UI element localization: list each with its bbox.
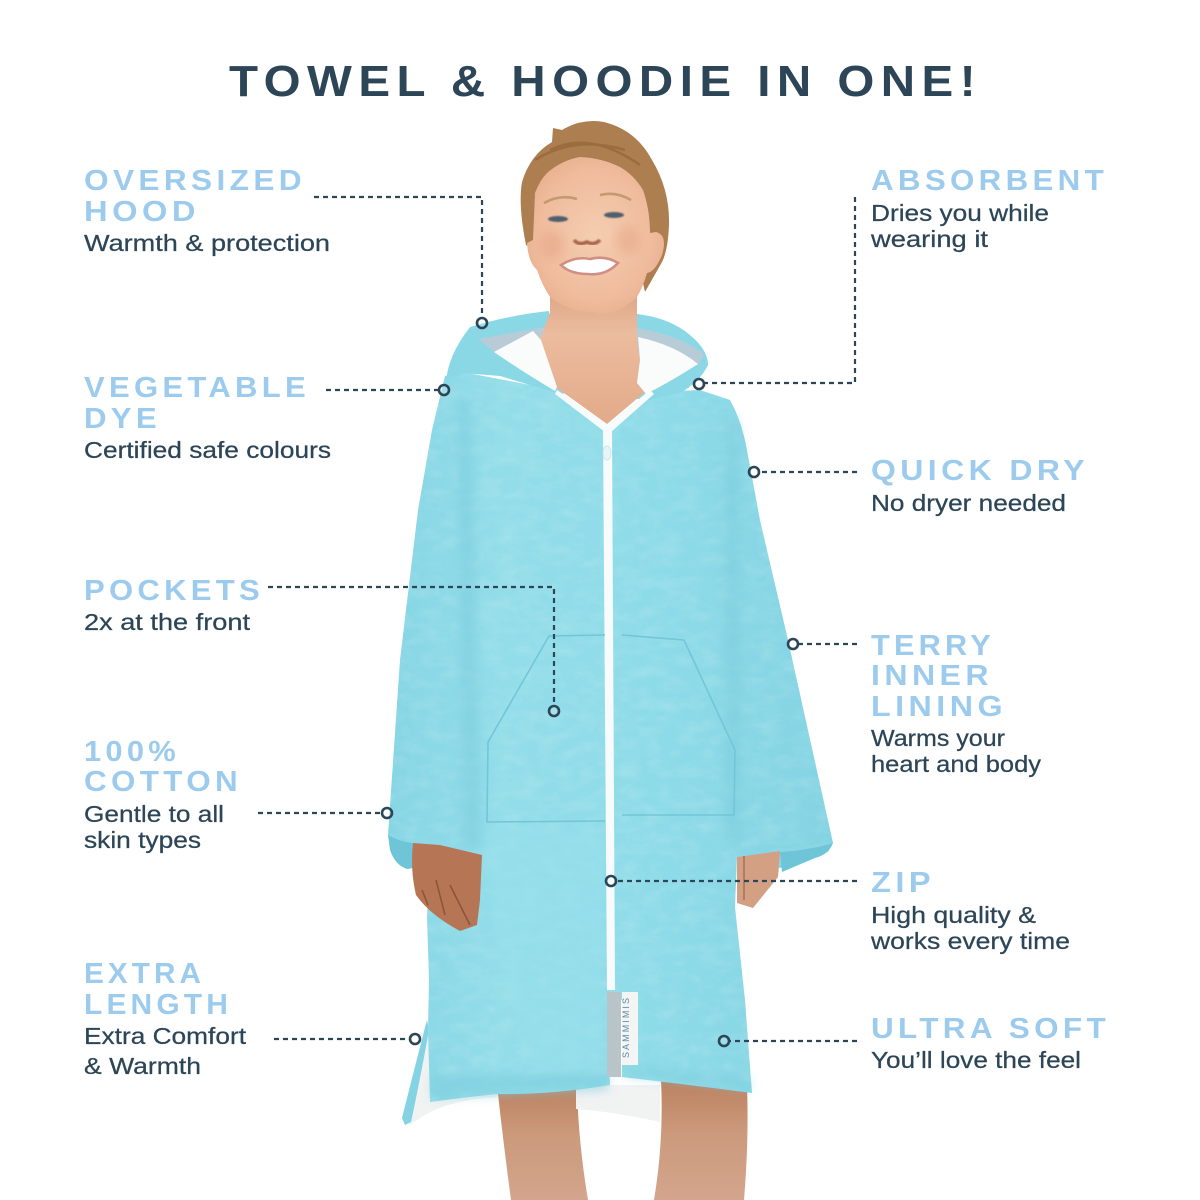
callout: terry inner lining: INNER <box>871 660 993 692</box>
callout: pockets <box>84 575 559 716</box>
callout: 100% cotton: 100% <box>84 736 180 768</box>
callout: terry inner lining: LINING <box>871 691 1007 723</box>
callout: extra length: EXTRA <box>84 958 205 990</box>
callout: absorbent: wearing it <box>870 226 989 252</box>
face <box>527 157 664 313</box>
label tag: SAMMIMIS <box>621 998 631 1058</box>
title: TOWEL & HOODIE IN ONE! <box>229 57 982 106</box>
hair <box>521 121 669 292</box>
pockets <box>487 635 735 822</box>
callout: quick dry: No dryer needed <box>871 490 1066 516</box>
callout: zip <box>606 867 1070 954</box>
callout: extra length: & Warmth <box>84 1053 201 1079</box>
callout: extra length: Extra Comfort <box>84 1023 247 1049</box>
eyes <box>548 212 624 222</box>
neck and chest <box>540 285 645 424</box>
robe fabric texture <box>388 372 833 1102</box>
callout: ultra soft <box>719 1013 1110 1073</box>
callout: oversized hood: OVERSIZED <box>84 165 306 197</box>
callout: vegetable dye <box>84 372 449 463</box>
hands <box>412 843 780 931</box>
callout: extra length <box>84 958 420 1079</box>
callout: vegetable dye: DYE <box>84 403 161 435</box>
callout: zip: works every time <box>870 928 1070 954</box>
callout: 100% cotton <box>84 736 392 853</box>
hood <box>446 311 708 400</box>
eyebrows <box>544 194 631 203</box>
callout: 100% cotton: Gentle to all <box>84 801 224 827</box>
callout: ultra soft: You’ll love the feel <box>871 1047 1081 1073</box>
callout: extra length: LENGTH <box>84 989 232 1021</box>
callout: quick dry: QUICK DRY <box>871 455 1089 487</box>
zip <box>555 390 654 990</box>
callout: vegetable dye: Certified safe colours <box>84 437 331 463</box>
robe <box>388 372 833 1102</box>
callout: ultra soft: ULTRA SOFT <box>871 1013 1110 1045</box>
callout: zip: High quality & <box>871 902 1036 928</box>
callout: quick dry <box>749 455 1089 516</box>
callout: zip: ZIP <box>871 867 935 899</box>
white inner lining at hem <box>405 1025 660 1125</box>
callout: pockets: POCKETS <box>84 575 264 607</box>
legs <box>497 1080 748 1200</box>
callout: absorbent: Dries you while <box>871 200 1049 226</box>
callout: terry inner lining <box>788 630 1042 777</box>
callout: terry inner lining: heart and body <box>871 751 1042 777</box>
callout: terry inner lining: TERRY <box>871 630 995 662</box>
callout: oversized hood <box>84 165 487 328</box>
callout: oversized hood: Warmth & protection <box>84 230 330 256</box>
mouth <box>561 258 618 274</box>
label tag <box>607 992 638 1077</box>
robe shading <box>432 400 750 1098</box>
callout: pockets: 2x at the front <box>84 609 251 635</box>
callout: 100% cotton: skin types <box>84 827 201 853</box>
white terry lining <box>494 331 698 394</box>
nose <box>574 240 600 244</box>
callout: 100% cotton: COTTON <box>84 766 242 798</box>
head skin <box>527 157 664 313</box>
callout: absorbent: ABSORBENT <box>871 165 1108 197</box>
cheeks <box>540 231 564 259</box>
callout: oversized hood: HOOD <box>84 196 200 228</box>
callout: absorbent <box>694 165 1108 389</box>
callout: terry inner lining: Warms your <box>871 725 1005 751</box>
callout: vegetable dye: VEGETABLE <box>84 372 310 404</box>
illustration: boy wearing hooded towel <box>388 121 833 1200</box>
side vent flap <box>402 1020 429 1125</box>
sleeve cuffs <box>388 835 833 872</box>
